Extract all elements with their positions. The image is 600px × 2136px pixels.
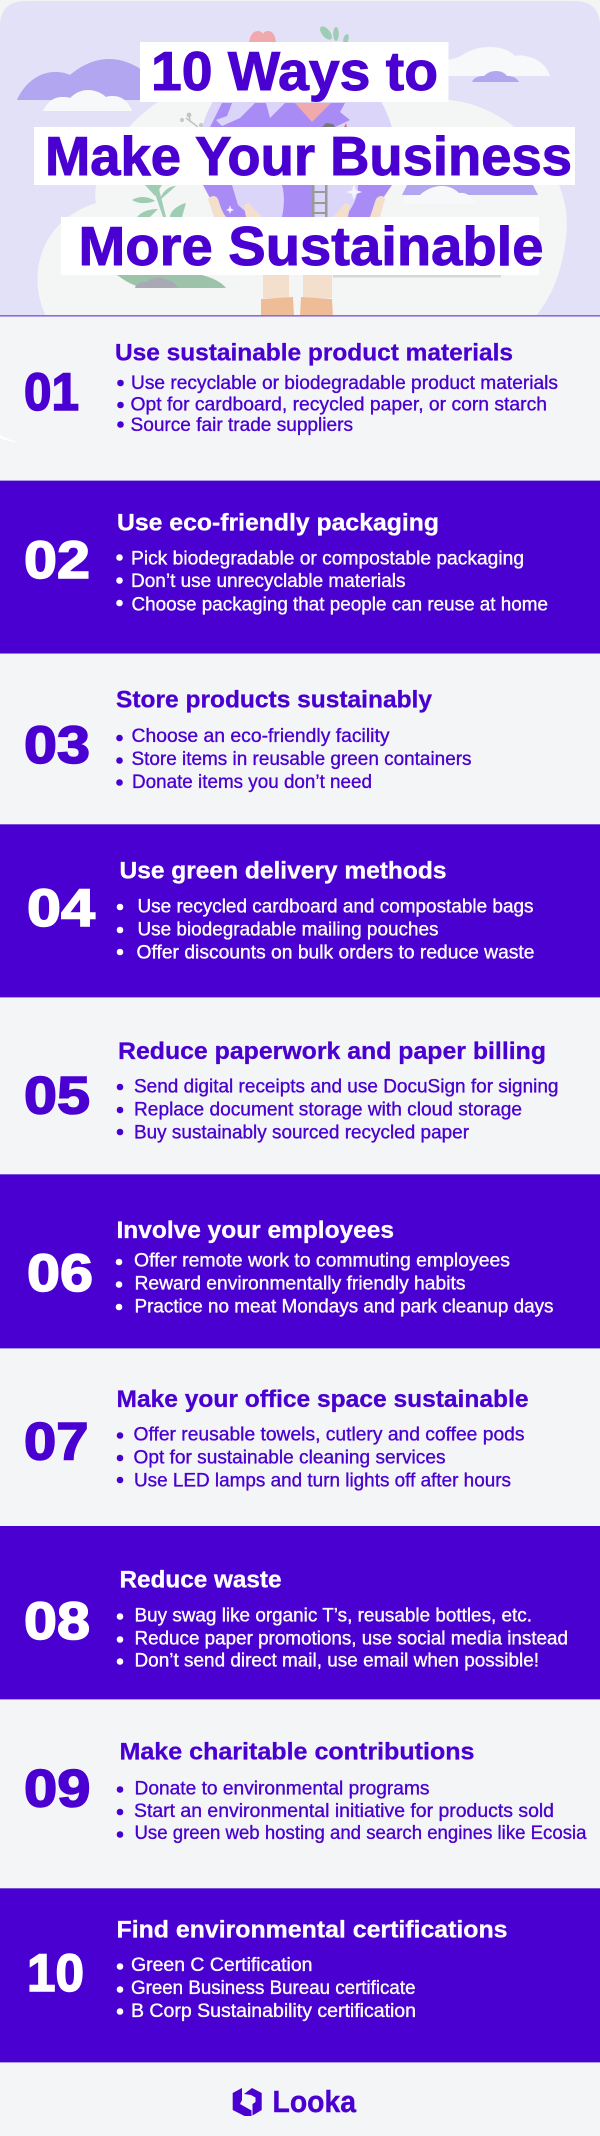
small gray sprig [181,113,202,127]
heading: title: Make Your Business [45,125,572,187]
list 06: Offer remote work to commuting employees [134,1250,510,1272]
heading: title: More Sustainable [78,215,544,277]
list 08: Reduce paper promotions, use social media instead [134,1628,568,1650]
hands [208,196,385,217]
list 04 [117,896,534,964]
panel: 06 [0,1174,600,1348]
list 07 [117,1424,525,1492]
list 07: Offer reusable towels, cutlery and coffee pods [134,1424,525,1446]
heading 06: Involve your employees [116,1217,394,1244]
list 01: Source fair trade suppliers [130,414,353,436]
list 09: Start an environmental initiative for products sold [134,1800,554,1822]
heading 09: Make charitable contributions [120,1738,475,1766]
list 05: Replace document storage with cloud storage [134,1098,522,1120]
logo: Looka [233,2084,357,2119]
ladder [312,185,328,217]
panel: 01 [0,317,600,481]
number 06: 06 [27,1244,93,1303]
list 05: Buy sustainably sourced recycled paper [134,1122,469,1144]
list 07: Use LED lamps and turn lights off after hours [134,1470,511,1492]
list 06 [116,1250,554,1318]
cloud: white left [43,90,132,111]
list 09 [117,1778,587,1844]
panel: 10 [0,1888,600,2062]
list 10 [117,1954,416,2022]
list 10: Green Business Bureau certificate [131,1977,416,1999]
icon: Looka hexagon mark [233,2088,262,2116]
panel: 02 [0,481,600,654]
panel dividers [0,480,600,2063]
list 01 [117,372,558,436]
list 08 [117,1604,568,1672]
cloud: white lower right [404,186,476,204]
heading: title [34,40,575,277]
sparkles [346,184,362,200]
background blob [38,78,567,316]
panel: 09 [0,1699,600,1888]
number 01: 01 [24,363,79,422]
list 03: Choose an eco-friendly facility [132,725,390,747]
number 04: 04 [27,879,96,938]
ground line [333,275,501,278]
list 04: Use recycled cardboard and compostable bags [138,896,534,918]
list 06: Practice no meat Mondays and park cleanup days [134,1296,554,1318]
list 02: Choose packaging that people can reuse at home [132,594,548,616]
heading 03: Store products sustainably [116,686,433,714]
list 08: Don’t send direct mail, use email when possible! [134,1650,539,1672]
list 05: Send digital receipts and use DocuSign for signing [134,1076,558,1098]
list 04: Use biodegradable mailing pouches [138,918,439,940]
cloud: purple lower right [402,185,538,195]
heading 05: Reduce paperwork and paper billing [118,1038,546,1065]
heading 10: Find environmental certifications [116,1916,508,1944]
panel: header illustration [0,0,600,317]
list 03 [116,725,472,793]
heart [249,31,276,45]
number 08: 08 [24,1592,90,1651]
plant [132,185,186,217]
rock [135,278,178,288]
panel: 03 [0,654,600,824]
wordmark: Looka [272,2084,357,2119]
heading 01: Use sustainable product materials [115,340,513,366]
number 10: 10 [27,1944,84,2003]
list 05 [117,1076,558,1144]
heading 08: Reduce waste [120,1566,282,1594]
list 09: Donate to environmental programs [134,1778,430,1800]
panel: 08 [0,1526,600,1699]
heading 04: Use green delivery methods [120,858,446,884]
leaves: top sprig [318,24,350,45]
list 02 [116,548,548,616]
boots [261,297,333,316]
panel: 04 [0,824,600,997]
heading 07: Make your office space sustainable [116,1386,528,1413]
heading: title: 10 Ways to [151,40,438,102]
cloud: white upper right [440,47,550,76]
list 08: Buy swag like organic T’s, reusable bottles, etc. [134,1604,532,1626]
heading 02: Use eco-friendly packaging [117,510,439,536]
list 07: Opt for sustainable cleaning services [134,1446,446,1468]
cloud: large purple left [17,59,145,100]
list 03: Donate items you don’t need [132,771,372,793]
cloud: small purple upper right [472,71,519,82]
list 02: Don’t use unrecyclable materials [131,570,406,592]
globe [199,54,395,250]
list 03: Store items in reusable green containers [132,748,472,770]
list 10: B Corp Sustainability certification [131,2000,416,2022]
number 07: 07 [24,1412,88,1472]
list 02: Pick biodegradable or compostable packaging [131,548,524,570]
panel: 07 [0,1348,600,1526]
panel: 05 [0,997,600,1174]
number 09: 09 [24,1760,90,1818]
list 10: Green C Certification [131,1954,312,1976]
list 06: Reward environmentally friendly habits [134,1272,466,1294]
number 03: 03 [24,716,90,775]
legs [263,275,332,298]
bush [117,275,226,288]
list 04: Offer discounts on bulk orders to reduce waste [136,942,534,964]
number 02: 02 [24,531,90,590]
list 01: Opt for cardboard, recycled paper, or corn starch [130,394,547,416]
divider line [0,315,600,317]
number 05: 05 [24,1066,90,1126]
list 09: Use green web hosting and search engines like Ecosia [134,1822,587,1844]
list 01: Use recyclable or biodegradable product materials [131,372,558,394]
